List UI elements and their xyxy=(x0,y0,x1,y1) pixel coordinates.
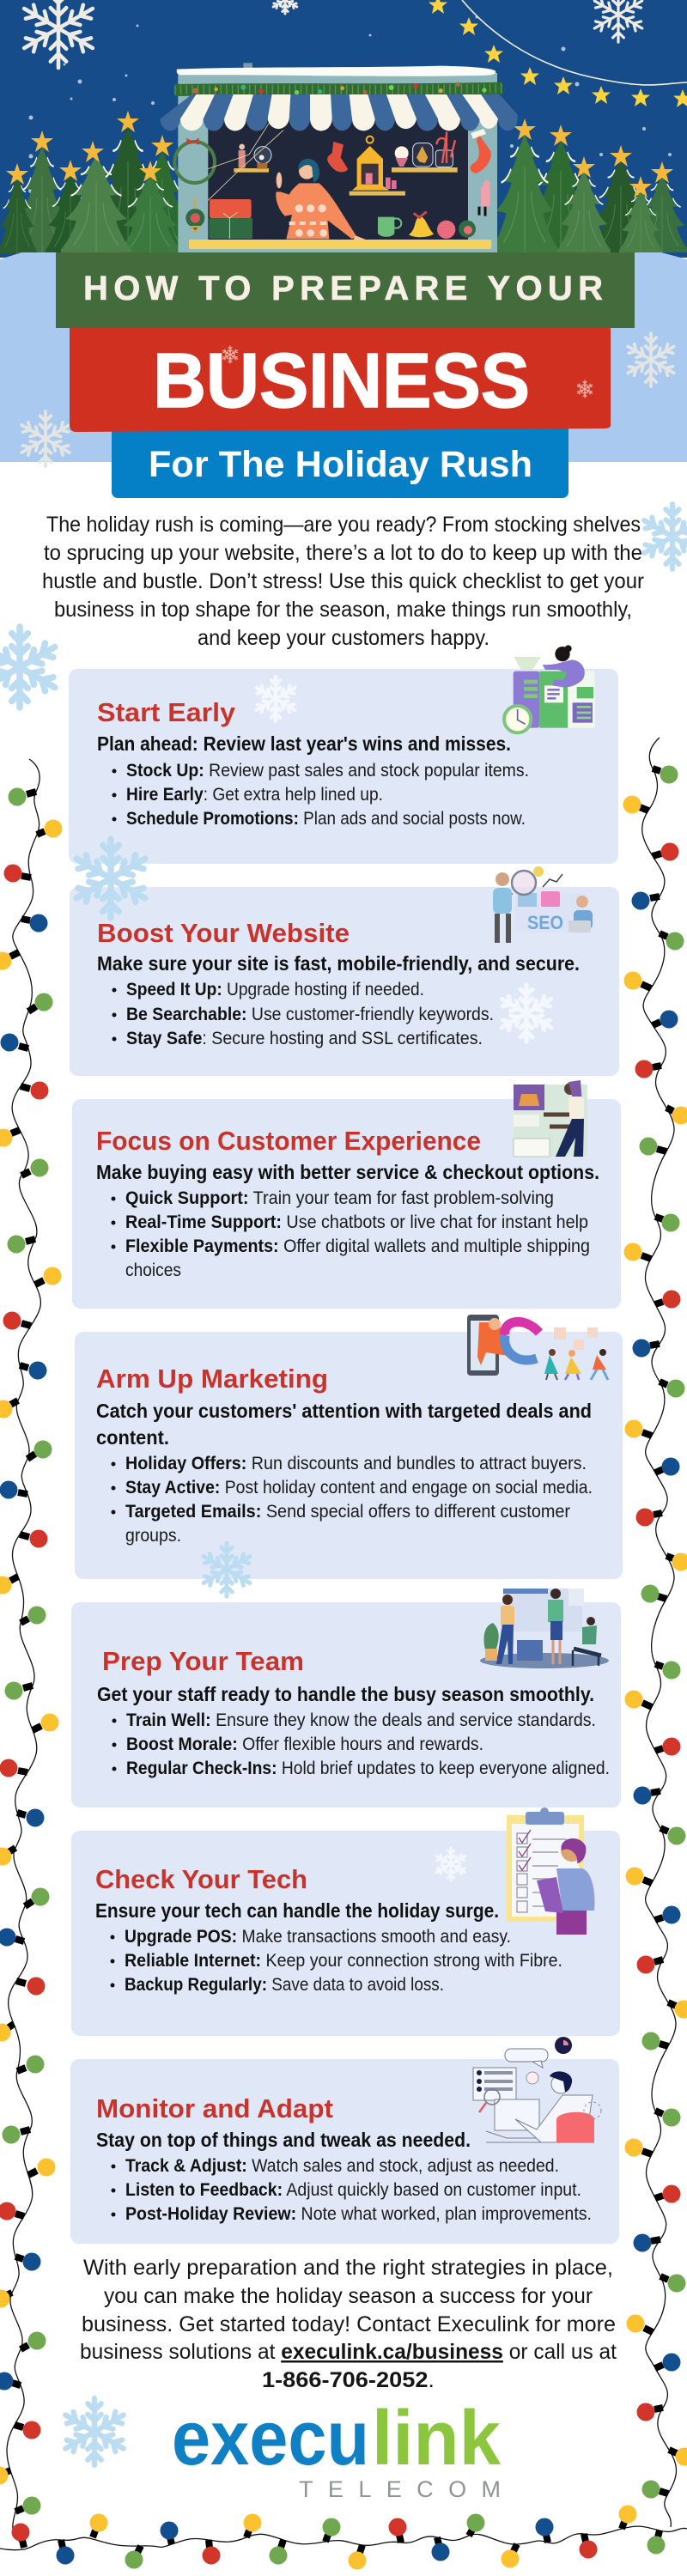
icon: monitoring analyst xyxy=(473,2037,601,2142)
snow dots xyxy=(28,15,672,251)
icon: team meeting xyxy=(480,1589,609,1668)
subheading: Stay on top of things and tweak as needed. xyxy=(96,2129,471,2151)
checklist: Track & Adjust: Watch sales and stock, adjust as needed. xyxy=(125,2156,559,2176)
intro paragraph: business in top shape for the season, make things run smoothly, xyxy=(54,598,632,622)
blue banner xyxy=(112,421,568,498)
subheading: Catch your customers' attention with targeted deals and xyxy=(96,1400,592,1422)
execulink telecom logo: execu xyxy=(172,2396,369,2482)
checklist: Post-Holiday Review: Note what worked, plan improvements. xyxy=(125,2204,592,2224)
decorative snowflakes: blue xyxy=(0,504,687,2465)
dessert and jars xyxy=(395,131,455,167)
stocking right xyxy=(471,129,491,173)
lantern xyxy=(352,137,389,191)
checklist: Speed It Up: Upgrade hosting if needed. xyxy=(126,980,424,999)
garland xyxy=(174,82,502,94)
light blue snow field xyxy=(0,252,687,462)
checklist xyxy=(112,2156,592,2224)
checklist: Backup Regularly: Save data to avoid loss. xyxy=(125,1975,444,1995)
checklist xyxy=(112,1454,593,1546)
checklist: Schedule Promotions: Plan ads and social posts now. xyxy=(126,809,526,829)
execulink telecom logo xyxy=(172,2396,502,2502)
stocking center xyxy=(327,142,348,172)
checklist xyxy=(112,1188,590,1280)
icon: SEO team xyxy=(493,866,593,943)
checklist: Flexible Payments: Offer digital wallets and multiple shipping xyxy=(125,1236,590,1256)
panel: arm up marketing xyxy=(75,1332,623,1579)
execulink telecom logo: link xyxy=(372,2396,502,2482)
checklist: Stay Safe: Secure hosting and SSL certificates. xyxy=(126,1029,483,1048)
closing paragraph: 1-866-706-2052 . xyxy=(262,2368,435,2392)
blue banner: For The Holiday Rush xyxy=(149,444,532,485)
subheading: Make sure your site is fast, mobile-friendly, and secure. xyxy=(97,952,580,975)
checklist: choices xyxy=(125,1261,181,1280)
closing paragraph: business. Get started today! Contact Execulink for more xyxy=(82,2312,616,2336)
snowflakes on snow field xyxy=(19,333,677,466)
subheading: Make buying easy with better service & checkout options. xyxy=(96,1161,599,1183)
snow on roof xyxy=(177,66,495,76)
intro paragraph: The holiday rush is coming—are you ready? From stocking shelves xyxy=(46,513,641,537)
icon: planning board xyxy=(504,645,595,732)
intro paragraph xyxy=(42,513,644,650)
icon: marketing magnet xyxy=(467,1315,608,1380)
pine trees left xyxy=(0,111,190,253)
star string lights xyxy=(429,0,687,107)
wreath xyxy=(174,138,215,183)
closing paragraph: you can make the holiday season a success for your xyxy=(104,2284,593,2308)
checklist: Stock Up: Review past sales and stock popular items. xyxy=(126,761,529,781)
icon: SEO team: SEO xyxy=(527,912,563,933)
checklist: groups. xyxy=(125,1526,181,1546)
heading: check your tech: Check Your Tech xyxy=(95,1864,307,1894)
shelves xyxy=(234,167,458,196)
intro paragraph: and keep your customers happy. xyxy=(198,626,489,650)
pine trees right xyxy=(492,118,687,253)
panel: start early xyxy=(69,669,618,864)
decorative snowflakes: white xyxy=(254,677,554,1880)
title banner: green xyxy=(56,252,635,328)
checklist: Reliable Internet: Keep your connection strong with Fibre. xyxy=(125,1951,562,1971)
checklist: Boost Morale: Offer flexible hours and rewards. xyxy=(126,1735,483,1754)
checklist xyxy=(112,980,494,1048)
heading: prep your team: Prep Your Team xyxy=(102,1646,304,1676)
icon: online shopper xyxy=(514,1080,587,1157)
striped awning xyxy=(161,94,518,131)
ornament xyxy=(185,197,204,232)
shop wall xyxy=(178,73,497,253)
closing paragraph: With early preparation and the right strategies in place, xyxy=(83,2256,613,2280)
checklist: Stay Active: Post holiday content and engage on social media. xyxy=(125,1478,593,1498)
closing paragraph: business solutions at execulink.ca/business or call us at xyxy=(80,2340,617,2364)
panel: focus on customer experience xyxy=(72,1099,621,1309)
subheading: content. xyxy=(96,1426,169,1449)
checklist: Targeted Emails: Send special offers to different customer xyxy=(125,1502,570,1522)
checklist xyxy=(110,1927,562,1995)
subheading: Ensure your tech can handle the holiday surge. xyxy=(95,1899,499,1922)
panel: prep your team xyxy=(71,1602,621,1807)
shop window xyxy=(208,118,468,240)
panel: boost your website xyxy=(70,887,619,1076)
checklist: Hire Early: Get extra help lined up. xyxy=(126,785,383,805)
string lights: left xyxy=(0,759,62,2548)
panel: check your tech xyxy=(71,1831,620,2036)
checklist: Regular Check-Ins: Hold brief updates to keep everyone aligned. xyxy=(126,1759,610,1778)
mug and ornaments xyxy=(378,212,476,239)
checklist: Upgrade POS: Make transactions smooth and easy. xyxy=(125,1927,511,1947)
nutcracker and snow globe xyxy=(239,144,271,169)
checklist xyxy=(112,1710,610,1778)
gift boxes xyxy=(209,199,252,239)
holiday shop illustration xyxy=(161,63,518,253)
subheading: Get your staff ready to handle the busy season smoothly. xyxy=(97,1683,594,1705)
title banner: red: BUSINESS xyxy=(153,338,530,424)
execulink telecom logo: TELECOM xyxy=(299,2476,501,2502)
hero: night sky xyxy=(0,0,687,258)
intro paragraph: hustle and bustle. Don’t stress! Use this quick checklist to get your xyxy=(42,569,644,593)
heading: start early: Start Early xyxy=(97,697,236,727)
string lights: bottom xyxy=(0,2506,687,2569)
checklist: Real-Time Support: Use chatbots or live chat for instant help xyxy=(125,1212,588,1232)
chimney xyxy=(243,63,252,69)
checklist: Listen to Feedback: Adjust quickly based on customer input. xyxy=(125,2180,581,2200)
heading: monitor and adapt: Monitor and Adapt xyxy=(96,2093,333,2123)
checklist: Holiday Offers: Run discounts and bundles to attract buyers. xyxy=(125,1454,587,1473)
icon: clipboard checklist xyxy=(507,1807,594,1935)
snowflakes in sky xyxy=(21,0,645,68)
nutcracker right xyxy=(479,180,490,216)
heading: arm up marketing: Arm Up Marketing xyxy=(96,1364,328,1394)
title banner: green: HOW TO PREPARE YOUR xyxy=(83,270,603,307)
subheading xyxy=(96,1400,592,1449)
shop counter xyxy=(189,240,491,249)
closing paragraph xyxy=(80,2256,617,2392)
checklist: Quick Support: Train your team for fast problem-solving xyxy=(125,1188,554,1208)
checklist: Train Well: Ensure they know the deals and service standards. xyxy=(126,1710,596,1730)
subheading: Plan ahead: Review last year's wins and misses. xyxy=(97,732,511,755)
candles xyxy=(386,178,397,189)
fairy lights xyxy=(208,123,283,200)
checklist: Be Searchable: Use customer-friendly keywords. xyxy=(126,1005,494,1024)
title banner: red xyxy=(70,328,611,432)
checklist xyxy=(112,761,529,829)
panel: monitor and adapt xyxy=(70,2059,619,2244)
heading: boost your website: Boost Your Website xyxy=(97,918,350,948)
shopkeeper xyxy=(276,159,367,240)
heading: customer experience: Focus on Customer Experience xyxy=(96,1126,481,1156)
intro paragraph: to sprucing up your website, there’s a lot to do to keep up with the xyxy=(44,541,642,565)
string lights: right xyxy=(623,738,687,2527)
